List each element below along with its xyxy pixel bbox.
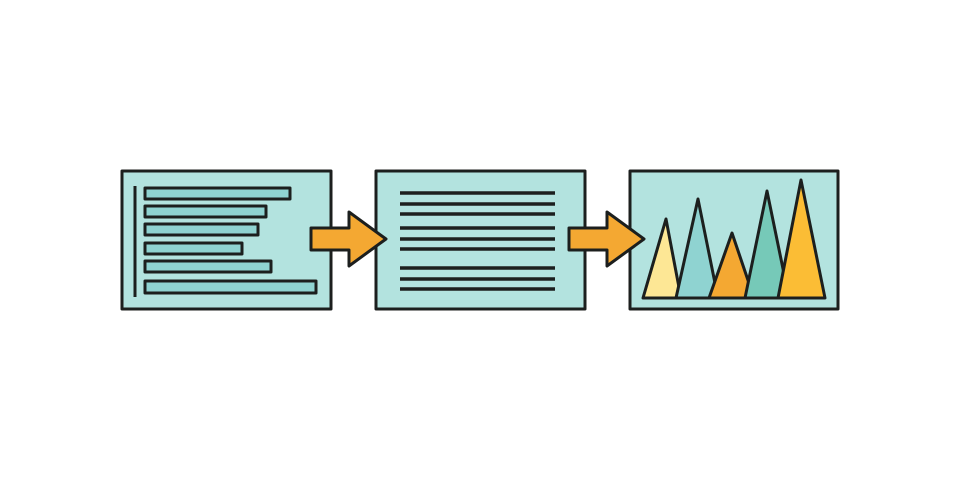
triangle peaks [643,180,825,298]
arrow: step 1 to 2 [311,212,386,266]
panel: triangle chart [630,171,838,309]
panel: text lines [376,171,585,309]
arrow: step 2 to 3 [569,212,644,266]
panel: bar list [122,171,331,309]
